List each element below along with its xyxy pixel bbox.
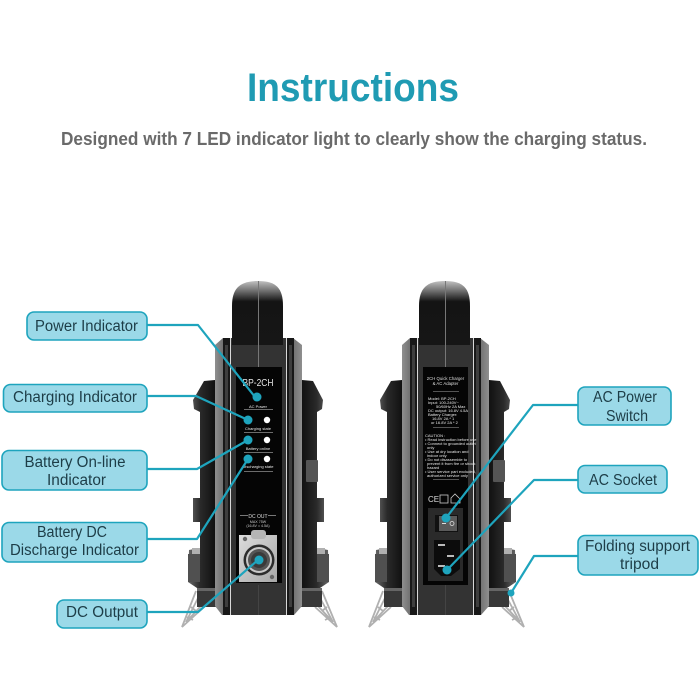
callout: AC Socket: AC Socket bbox=[589, 472, 658, 489]
back specification panel: DC output: 16.8V 4.5A bbox=[428, 408, 468, 413]
back specification panel: Input: 100-240V~ bbox=[428, 400, 459, 405]
back specification panel: • Do not disassemble to bbox=[425, 457, 468, 462]
back specification panel: prevent it from fire or shock bbox=[427, 461, 475, 466]
front control panel bbox=[236, 367, 282, 583]
callout: Folding support tripod bbox=[508, 536, 698, 596]
back specification panel: • User service part excluded, bbox=[425, 469, 476, 474]
back specification panel: • Connect to grounded outlet bbox=[425, 441, 477, 446]
front control panel: AC Power bbox=[249, 404, 268, 409]
back specification panel: or 16.8V 2A * 2 bbox=[431, 420, 459, 425]
callout: AC Power Switch: AC Power bbox=[593, 389, 657, 406]
AC power rocker switch bbox=[428, 508, 463, 537]
back specification panel: only bbox=[427, 445, 434, 450]
back specification panel: 16.8V 2A * 1 bbox=[432, 416, 455, 421]
back specification panel: 50/60Hz 2A Max bbox=[436, 404, 465, 409]
back specification panel: authorized service only bbox=[427, 473, 468, 478]
callout: Power Indicator: Power Indicator bbox=[35, 318, 138, 335]
callout: Folding support tripod: Folding support bbox=[585, 538, 691, 555]
back specification panel: CE bbox=[428, 495, 439, 504]
back specification panel: hazard bbox=[427, 465, 439, 470]
callout: Charging Indicator bbox=[4, 384, 252, 424]
front control panel: Discharging state bbox=[243, 464, 274, 469]
callout: Battery On-line Indicator: Indicator bbox=[47, 472, 106, 489]
charger front view bbox=[182, 281, 337, 627]
front control panel: DC OUT bbox=[248, 514, 268, 520]
front control panel: Battery online bbox=[246, 446, 271, 451]
callout: Folding support tripod: tripod bbox=[620, 556, 659, 573]
back specification panel bbox=[423, 367, 477, 585]
title: Instructions bbox=[247, 66, 459, 110]
callout: Battery DC Discharge Indicator bbox=[2, 454, 252, 562]
back specification panel: & AC Adapter bbox=[433, 381, 459, 386]
back specification panel: Model: BP-2CH bbox=[428, 396, 456, 401]
subtitle: Designed with 7 LED indicator light to clearly show the charging status. bbox=[61, 129, 647, 149]
back specification panel: indoor only bbox=[427, 453, 447, 458]
XLR DC output connector bbox=[239, 530, 277, 582]
callout: Power Indicator bbox=[27, 312, 262, 402]
callout: Battery On-line Indicator: Battery On-line bbox=[24, 454, 126, 471]
callout: Battery DC Discharge Indicator: Discharge Indicator bbox=[10, 542, 139, 559]
callout: DC Output: DC Output bbox=[66, 604, 139, 621]
back specification panel: 2CH Quick Charger bbox=[427, 376, 465, 381]
callout: AC Power Switch bbox=[442, 387, 671, 522]
callout: AC Power Switch: Switch bbox=[606, 408, 648, 425]
callout: DC Output bbox=[57, 556, 264, 628]
back specification panel: • Read instruction before use bbox=[425, 437, 477, 442]
back specification panel: • Use at dry location and bbox=[425, 449, 468, 454]
back specification panel: Battery Charger: bbox=[428, 412, 457, 417]
back specification panel: CAUTION : bbox=[425, 433, 445, 438]
callout: Battery DC Discharge Indicator: Battery DC bbox=[37, 524, 107, 541]
callout: AC Socket bbox=[442, 466, 667, 574]
front control panel: Charging state bbox=[245, 426, 272, 431]
callout: Battery On-line Indicator bbox=[2, 436, 252, 490]
charger back view bbox=[369, 281, 524, 627]
front control panel: BP-2CH bbox=[242, 377, 274, 389]
front control panel: (16.8V = 4.5A) bbox=[246, 524, 270, 528]
AC power socket bbox=[428, 537, 463, 581]
callout: Charging Indicator: Charging Indicator bbox=[13, 389, 137, 406]
front control panel: MAX 75W bbox=[250, 520, 267, 524]
